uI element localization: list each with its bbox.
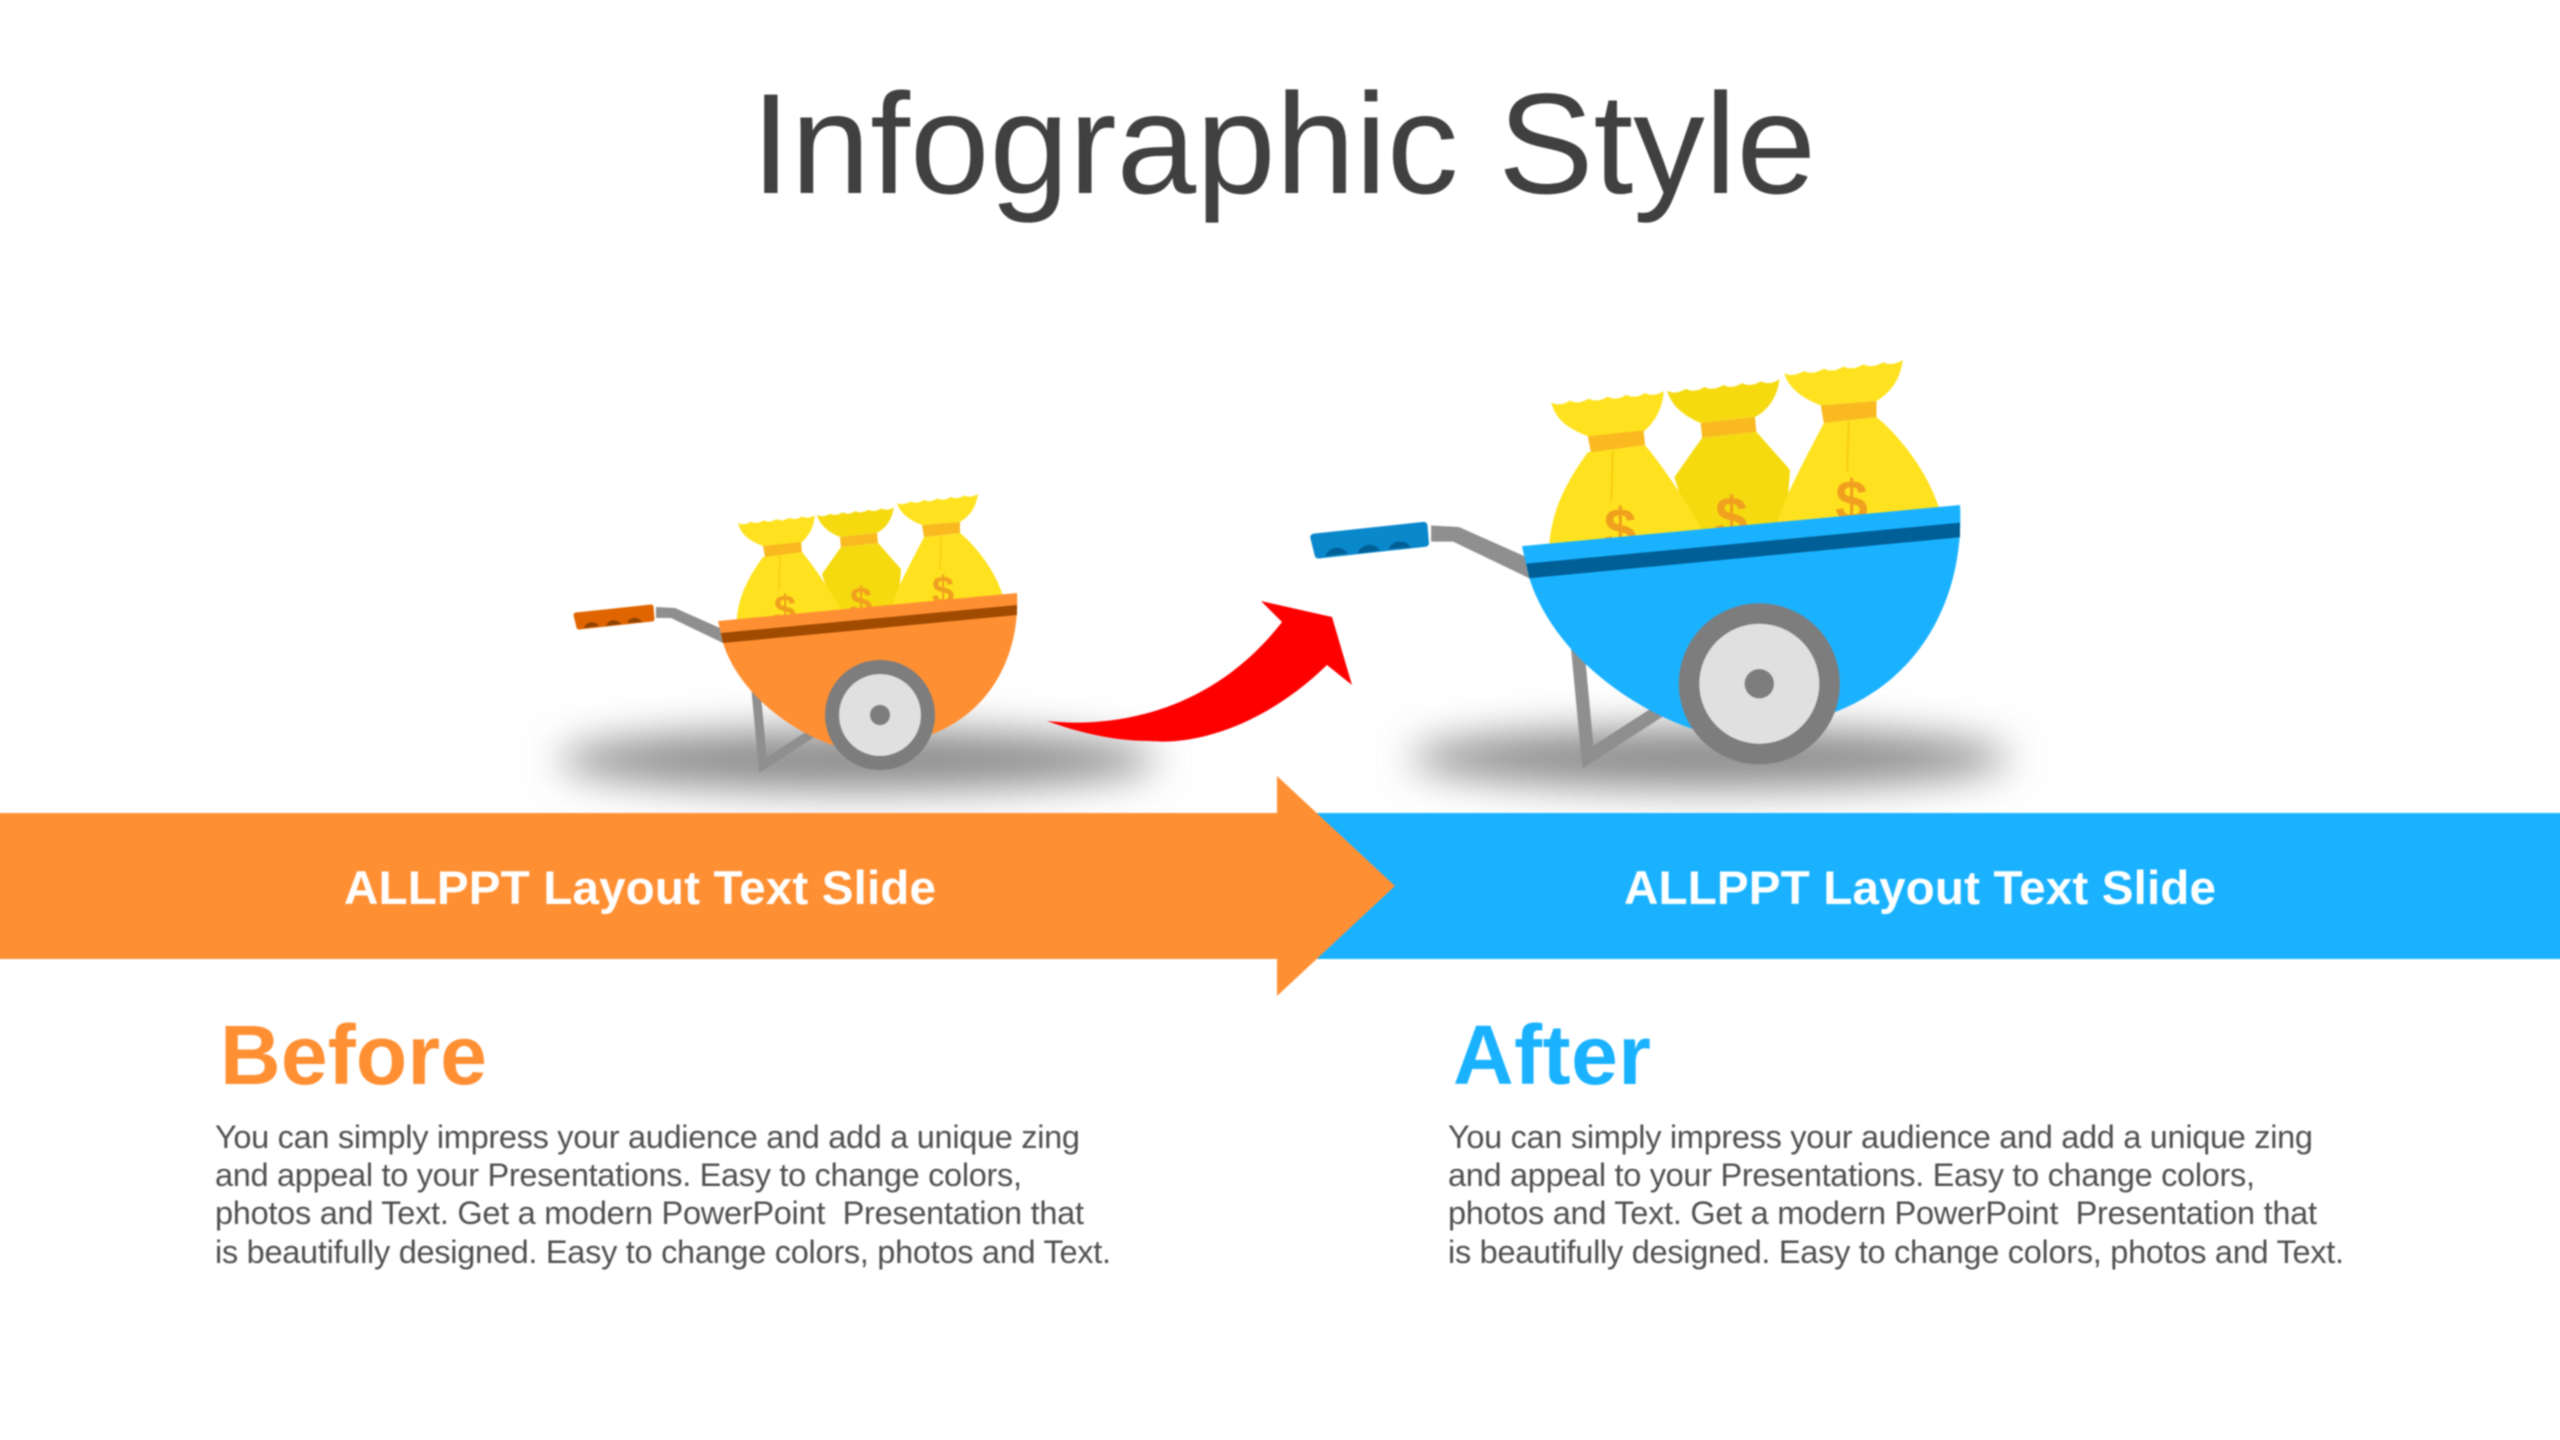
bag right: [892, 494, 1003, 613]
wheel: [825, 660, 935, 770]
text block: after description: photos and Text. Get a modern PowerPoint Presentation that: [1448, 1195, 2317, 1231]
shadow: small cart: [558, 730, 1158, 790]
text block: before description: You can simply impress your audience and add a unique zing: [215, 1119, 1080, 1155]
wheel: [1679, 603, 1840, 764]
bag left: [1549, 391, 1704, 562]
bag middle: $: [850, 580, 872, 624]
wheelbarrow: after (large blue): [1314, 360, 1960, 764]
stand: [755, 680, 825, 765]
handle grip: [576, 607, 652, 628]
bag middle: $: [1715, 485, 1748, 550]
shadow: large cart: [1410, 728, 2010, 788]
arrow: red curved growth arrow: [1047, 601, 1352, 742]
text block: after description: is beautifully designed. Easy to change colors, photos and Text.: [1448, 1234, 2344, 1270]
text block: before description: photos and Text. Get a modern PowerPoint Presentation that: [215, 1195, 1084, 1231]
handle grip: [1314, 526, 1425, 556]
banner: orange before arrow: [0, 776, 1395, 996]
heading: after: After: [1453, 1008, 1651, 1102]
bag left: $: [1604, 497, 1636, 562]
title: Infographic Style: [751, 65, 1816, 224]
money bags: [736, 494, 1003, 632]
text block: after description: and appeal to your Presentations. Easy to change colors,: [1448, 1157, 2255, 1193]
handle arm: [656, 607, 723, 643]
rim band: [721, 605, 1017, 643]
money bags: [1549, 360, 1939, 562]
bag right: $: [932, 569, 954, 613]
bowl: [718, 593, 1017, 755]
bag middle: [817, 507, 901, 624]
handle arm: [1431, 526, 1529, 578]
text block: after description: [1448, 1119, 2344, 1270]
heading: before: Before: [220, 1008, 487, 1102]
rim band: [1526, 523, 1960, 578]
bag right: [1777, 360, 1939, 534]
bag left: $: [774, 588, 796, 632]
text block: before description: and appeal to your Presentations. Easy to change colors,: [215, 1157, 1022, 1193]
text block: after description: You can simply impress your audience and add a unique zing: [1448, 1119, 2313, 1155]
banner: blue after bar: [1300, 813, 2560, 959]
stand: [1576, 632, 1679, 757]
banner label: after: ALLPPT Layout Text Slide: [1624, 862, 2216, 915]
bag left: [736, 515, 842, 632]
text block: before description: is beautifully designed. Easy to change colors, photos and Text.: [215, 1234, 1111, 1270]
text block: before description: [215, 1119, 1111, 1270]
wheelbarrow: before (small orange): [576, 494, 1017, 770]
banner label: before: ALLPPT Layout Text Slide: [344, 862, 936, 915]
bowl: [1522, 505, 1960, 742]
bag right: $: [1835, 469, 1868, 534]
bag middle: [1667, 379, 1790, 550]
